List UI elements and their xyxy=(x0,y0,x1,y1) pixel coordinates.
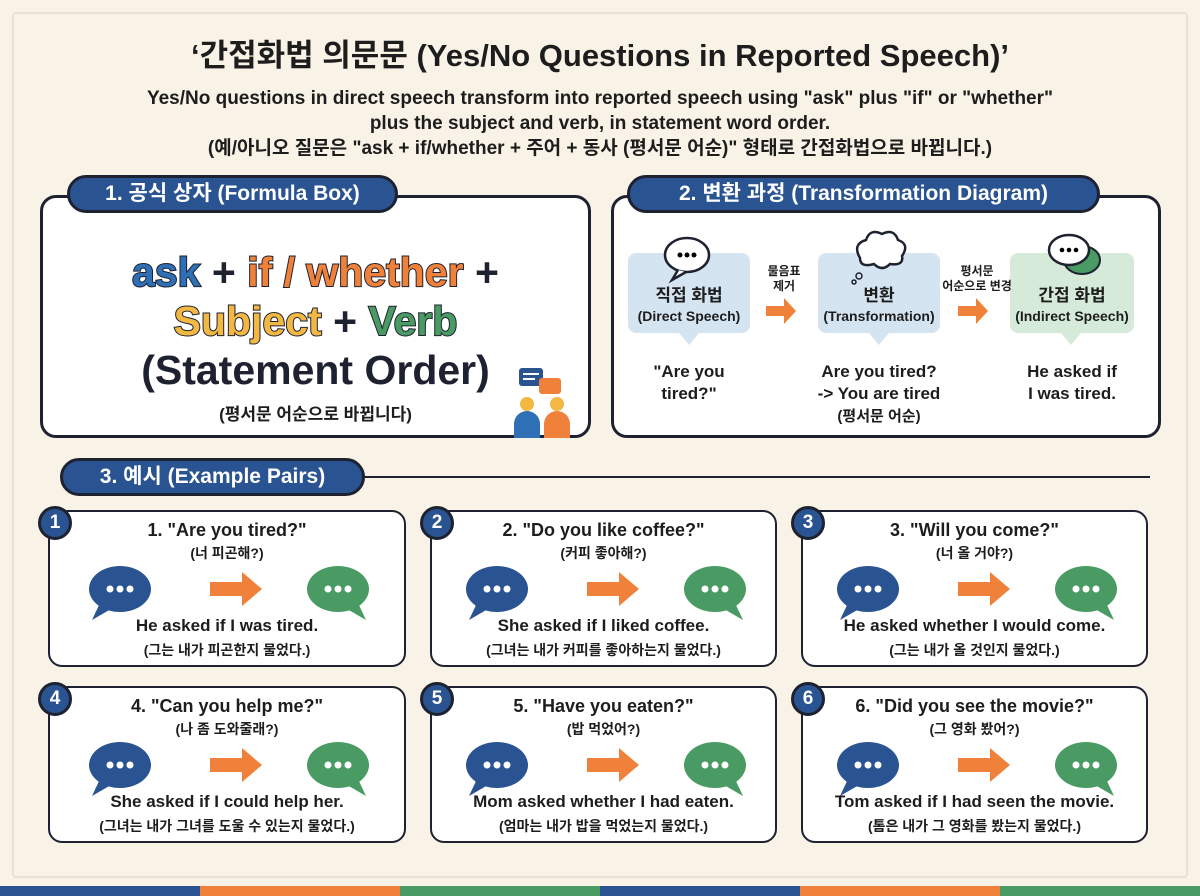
card 6: Tom asked if I had seen the movie. xyxy=(835,792,1114,811)
card 5: 5 xyxy=(432,688,442,709)
card 2: 2. "Do you like coffee?" xyxy=(502,520,705,540)
card 3 xyxy=(801,510,1148,667)
arrow label: statement order xyxy=(942,264,1012,293)
card 4: (나 좀 도와줄래?) xyxy=(176,721,278,737)
card 6: 6 xyxy=(803,688,813,709)
card 3: He asked whether I would come. xyxy=(844,616,1105,635)
step: direct speech xyxy=(628,253,750,333)
panel: transformation diagram: (Transformation) xyxy=(823,308,935,324)
card 5: (엄마는 내가 밥을 먹었는지 물었다.) xyxy=(499,818,708,834)
arrow label: statement order: 평서문 xyxy=(960,264,994,278)
panel: transformation diagram: 변환 xyxy=(863,286,895,305)
panel: transformation diagram: I was tired. xyxy=(1028,384,1116,403)
card 5: Mom asked whether I had eaten. xyxy=(473,792,734,811)
icon: two people talking xyxy=(514,368,570,438)
card 4 xyxy=(48,686,406,843)
heading: example pairs: 3. 예시 (Example Pairs) xyxy=(100,465,325,488)
section line xyxy=(360,476,1150,478)
card 2: (그녀는 내가 커피를 좋아하는지 물었다.) xyxy=(486,642,721,658)
panel: transformation diagram: Are you tired? xyxy=(821,362,937,381)
card 5: 5. "Have you eaten?" xyxy=(513,696,694,716)
heading: formula box: 1. 공식 상자 (Formula Box) xyxy=(105,182,360,205)
panel: transformation diagram: 직접 화법 xyxy=(655,286,723,305)
panel: transformation diagram: -> You are tired xyxy=(818,384,940,403)
heading: example pairs xyxy=(60,458,365,496)
card 5: (밥 먹었어?) xyxy=(567,721,640,737)
arrow label: remove quotes: 제거 xyxy=(773,279,795,293)
heading: transformation diagram: 2. 변환 과정 (Transformation Diagram) xyxy=(679,182,1048,205)
card 1: 1 xyxy=(50,512,60,533)
card 3: (그는 내가 올 것인지 물었다.) xyxy=(889,642,1060,658)
card 1 xyxy=(48,510,406,667)
icons and arrows xyxy=(664,230,1101,345)
heading: transformation diagram xyxy=(627,175,1100,213)
panel: transformation diagram: (Indirect Speech) xyxy=(1015,308,1129,324)
card 3: (너 올 거야?) xyxy=(936,545,1013,561)
step: transformation xyxy=(818,253,940,333)
panel: transformation diagram xyxy=(611,195,1161,438)
card 2: 2 xyxy=(432,512,442,533)
title: ‘간접화법 의문문 (Yes/No Questions in Reported Speech)’ xyxy=(191,38,1009,73)
card 2 xyxy=(430,510,777,667)
arrow label: statement order: 어순으로 변경 xyxy=(942,279,1012,293)
card 4: She asked if I could help her. xyxy=(110,792,344,811)
panel: transformation diagram: (Direct Speech) xyxy=(638,308,740,324)
panel: transformation diagram: He asked if xyxy=(1027,362,1117,381)
card 1: 1. "Are you tired?" xyxy=(147,520,307,540)
subtitle: (예/아니오 질문은 "ask + if/whether + 주어 + 동사 (평서문 어순)" 형태로 간접화법으로 바뀝니다.) xyxy=(208,138,992,159)
card 1: (그는 내가 피곤한지 물었다.) xyxy=(144,642,310,658)
example texts: tired?" xyxy=(661,384,717,403)
formula text: (Statement Order) xyxy=(141,347,490,393)
panel: transformation diagram: (평서문 어순) xyxy=(837,408,921,425)
formula text xyxy=(132,249,499,393)
panel: formula box xyxy=(40,195,591,438)
subtitle: plus the subject and verb, in statement word order. xyxy=(370,113,830,134)
card 5 xyxy=(430,686,777,843)
arrow label: remove quotes xyxy=(767,264,801,293)
card 1: (너 피곤해?) xyxy=(190,545,264,561)
heading: formula box xyxy=(67,175,398,213)
card 1: He asked if I was tired. xyxy=(136,616,318,635)
subtitle xyxy=(147,88,1053,159)
subtitle: Yes/No questions in direct speech transform into reported speech using "ask" plus "if" or "whether" xyxy=(147,88,1053,109)
card 4: 4 xyxy=(50,688,60,709)
card 2: (커피 좋아해?) xyxy=(560,545,647,561)
formula text: ask + if / whether + xyxy=(132,249,499,295)
example texts: "Are you xyxy=(653,362,725,381)
card 4: 4. "Can you help me?" xyxy=(131,696,323,716)
formula text: Subject + Verb xyxy=(174,298,457,344)
formula korean note: (평서문 어순으로 바뀝니다) xyxy=(219,405,412,424)
card 6: 6. "Did you see the movie?" xyxy=(855,696,1094,716)
card 6 xyxy=(801,686,1148,843)
card 4: (그녀는 내가 그녀를 도울 수 있는지 물었다.) xyxy=(99,818,355,834)
panel: transformation diagram: 간접 화법 xyxy=(1038,286,1106,305)
card 6: (그 영화 봤어?) xyxy=(929,721,1020,737)
bottom color stripe xyxy=(0,886,1200,896)
card 3: 3. "Will you come?" xyxy=(890,520,1059,540)
step: indirect speech xyxy=(1010,253,1134,333)
card 2: She asked if I liked coffee. xyxy=(498,616,709,635)
arrow label: remove quotes: 물음표 xyxy=(767,264,801,278)
example texts xyxy=(653,362,725,403)
card 6: (톰은 내가 그 영화를 봤는지 물었다.) xyxy=(868,818,1081,834)
card 3: 3 xyxy=(803,512,813,533)
